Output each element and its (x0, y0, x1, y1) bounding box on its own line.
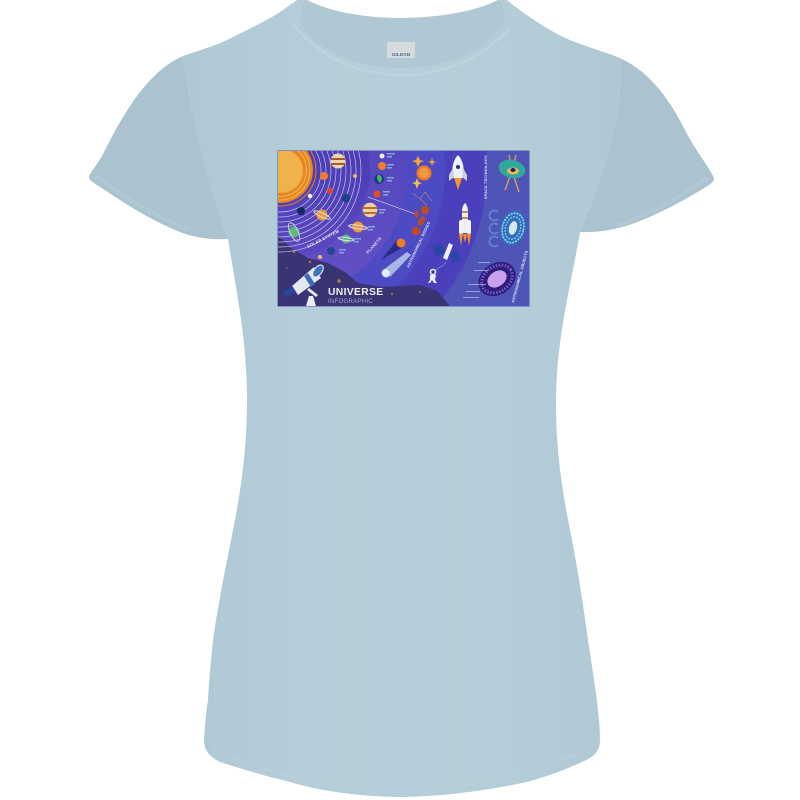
background bands (278, 151, 487, 298)
planet captions (339, 153, 395, 254)
title: INFOGRAPHIC (328, 299, 373, 305)
right sleeve (580, 58, 714, 232)
shirt body (183, 0, 621, 797)
gauge rings (489, 210, 498, 246)
universe infographic print (278, 151, 528, 306)
grey comet (382, 252, 411, 277)
telescope (283, 263, 325, 306)
black hole accretion disc (497, 155, 527, 192)
hill stars (286, 251, 421, 295)
title: UNIVERSE (328, 287, 383, 298)
solar system heading: SOLAR SYSTEM (306, 228, 340, 249)
print frame (278, 150, 530, 306)
bottom hem (212, 748, 592, 790)
neck label (387, 42, 415, 58)
white rocket (449, 155, 467, 190)
pointer line (368, 197, 418, 215)
left sleeve (89, 56, 228, 239)
stars and orange planet (412, 156, 436, 189)
planets column (318, 154, 386, 259)
neck label: GILDAN (392, 52, 411, 58)
asteroids (412, 206, 429, 235)
collar (293, 24, 510, 75)
astronaut (428, 262, 446, 283)
constellation (413, 192, 432, 205)
space technology heading: SPACE TECHNOLOGY (484, 155, 488, 199)
purple galaxy (478, 262, 516, 296)
planets heading: PLANETS (365, 236, 383, 255)
orange comet (381, 238, 406, 260)
title (328, 288, 383, 303)
satellite (432, 243, 461, 263)
solar system planets (286, 154, 357, 243)
astronomical bodies heading: ASTRONOMICAL BODIES (406, 221, 431, 268)
inner neck (300, 0, 505, 68)
spiral galaxy (500, 210, 526, 246)
astronomical objects heading: ASTRONOMICAL OBJECTS (511, 250, 529, 303)
t-shirt (89, 0, 714, 797)
galaxy labels (463, 262, 490, 298)
sleeve hems (96, 176, 707, 230)
dark foreground hill (278, 235, 450, 306)
sun and orbits (278, 151, 362, 252)
launch rocket (459, 203, 471, 246)
